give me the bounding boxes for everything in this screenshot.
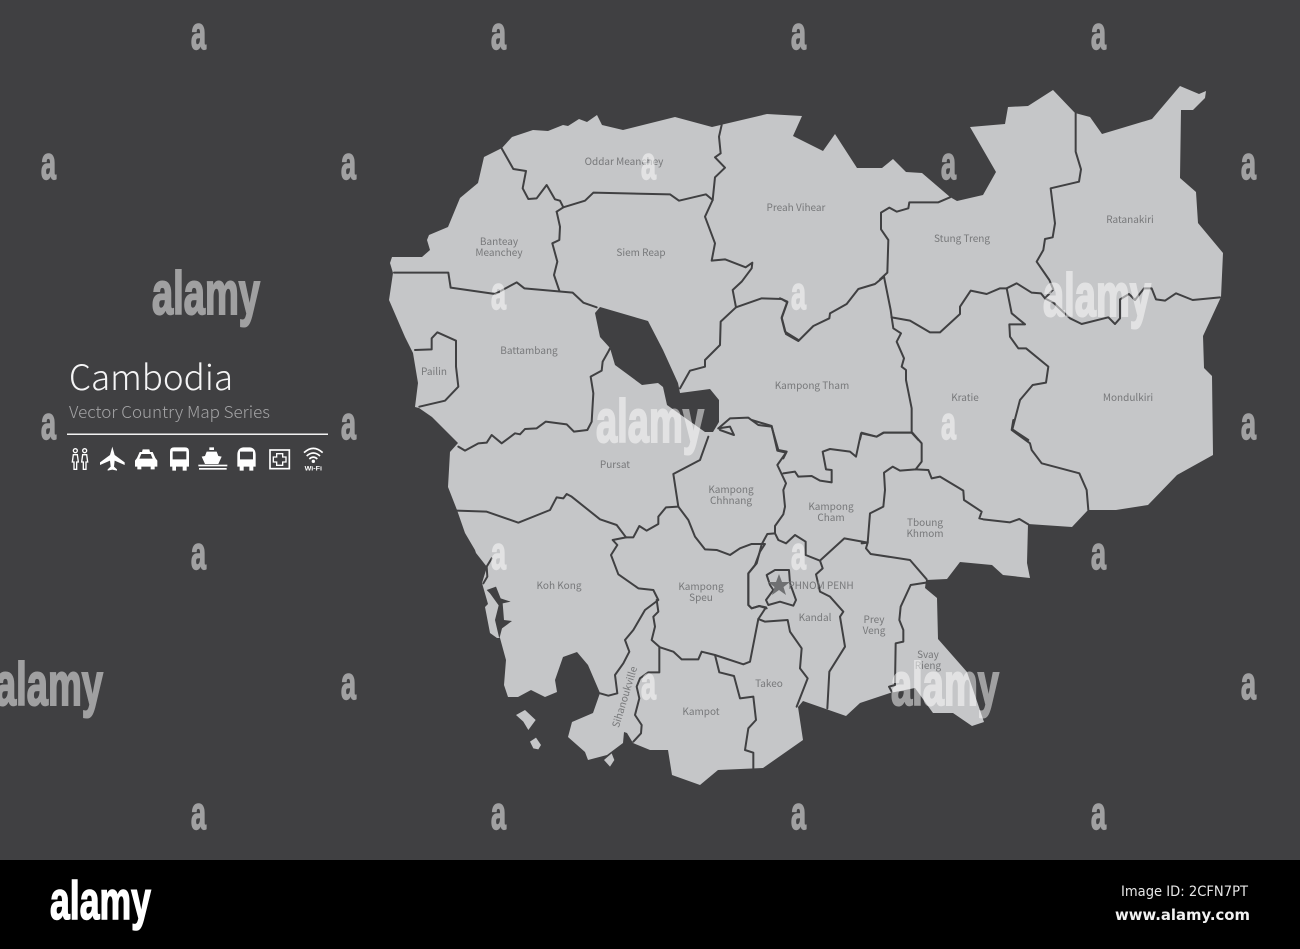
- icon: restroom: [72, 449, 88, 469]
- website: www.alamy.com: [1115, 906, 1250, 924]
- label: Prey Veng: Veng: [863, 622, 886, 637]
- icon: wifi: [304, 448, 323, 473]
- small watermark letters: a: [191, 787, 206, 839]
- small watermark letters: a: [1241, 397, 1256, 449]
- small watermark letters: a: [791, 527, 806, 579]
- small watermark letters: a: [341, 657, 356, 709]
- divider line: [67, 434, 328, 435]
- label: Kampong Cham: Cham: [817, 509, 845, 524]
- small watermark letters: a: [791, 267, 806, 319]
- icon: bus front: [237, 447, 256, 471]
- label: Banteay Meanchey: Meanchey: [475, 244, 523, 259]
- small watermark letters: a: [341, 397, 356, 449]
- small watermark letters: a: [641, 657, 656, 709]
- label: Kandal: Kandal: [799, 609, 832, 624]
- large watermark words: alamy: [1043, 262, 1151, 329]
- capital star: [768, 574, 790, 595]
- small watermark letters: a: [491, 527, 506, 579]
- image id: Image ID: 2CFN7PT: [1121, 884, 1248, 900]
- icon: bus: [170, 447, 189, 471]
- small watermark letters: a: [1091, 7, 1106, 59]
- label: Siem Reap: Siem Reap: [616, 244, 666, 259]
- label: Banteay Meanchey: Banteay: [480, 233, 519, 248]
- footer logo: alamy: [50, 871, 151, 931]
- small watermark letters: a: [491, 787, 506, 839]
- label: Pursat: Pursat: [600, 456, 630, 471]
- label: Kampong Cham: Kampong: [808, 498, 854, 513]
- province boundaries: north-west: [394, 125, 798, 458]
- small watermark letters: a: [491, 267, 506, 319]
- subtitle: Vector Country Map Series: [69, 399, 270, 423]
- small watermark letters: a: [791, 787, 806, 839]
- country silhouette: [389, 86, 1223, 785]
- small watermark letters: a: [491, 7, 506, 59]
- map of Cambodia: [389, 86, 1223, 785]
- label: Kratie: Kratie: [951, 389, 979, 404]
- label: Koh Kong: Koh Kong: [537, 577, 582, 592]
- label: Kampong Speu: Kampong: [678, 578, 724, 593]
- small watermark letters: a: [191, 7, 206, 59]
- icon: ferry boat: [198, 447, 227, 470]
- small watermark letters: a: [791, 7, 806, 59]
- footer bar: [0, 860, 1300, 949]
- icon: hospital cross: [270, 450, 289, 469]
- label: Pailin: Pailin: [421, 363, 447, 378]
- small watermark letters: a: [941, 397, 956, 449]
- label: Kampot: Kampot: [682, 703, 720, 718]
- small watermark letters: a: [341, 137, 356, 189]
- label: Prey Veng: Prey: [864, 611, 885, 626]
- label: Ratanakiri: Ratanakiri: [1106, 211, 1154, 226]
- icon: wifi: Wi-Fi: [305, 466, 322, 473]
- label: Kampong Chhnang: Chhnang: [710, 492, 752, 507]
- title block: [67, 350, 328, 435]
- large watermark words: alamy: [0, 651, 103, 718]
- label: Battambang: Battambang: [500, 342, 558, 357]
- coastal inlets, Koh Kong: [483, 558, 512, 639]
- large watermark words: alamy: [891, 651, 999, 718]
- province boundaries: south-east: [748, 420, 1088, 708]
- label: Preah Vihear: Preah Vihear: [767, 199, 826, 214]
- label: Sihanoukville: Sihanoukville: [607, 664, 640, 729]
- small watermark letters: a: [1241, 137, 1256, 189]
- icon: taxi: [135, 449, 157, 469]
- label: Kampong Tham: Kampong Tham: [775, 377, 849, 392]
- label: Takeo: Takeo: [755, 675, 783, 690]
- label: Phnom Penh: PHNOM PENH: [788, 577, 854, 592]
- title: Cambodia: [69, 350, 233, 401]
- small watermark letters: a: [1091, 787, 1106, 839]
- large watermark words: [0, 260, 1151, 718]
- small watermark letters: a: [1241, 657, 1256, 709]
- label: Svay Rieng: Rieng: [915, 657, 942, 672]
- large watermark words: alamy: [152, 260, 260, 327]
- label: Svay Rieng: Svay: [917, 646, 940, 661]
- large watermark words: alamy: [596, 388, 704, 455]
- icon: airplane: [100, 447, 125, 471]
- label: Mondulkiri: Mondulkiri: [1103, 389, 1153, 404]
- small watermark letters: a: [1091, 527, 1106, 579]
- small watermark letters: a: [191, 527, 206, 579]
- province labels: [421, 153, 1154, 729]
- label: Oddar Meanchey: Oddar Meanchey: [585, 153, 664, 168]
- label: Kampong Chhnang: Kampong: [708, 481, 754, 496]
- small watermark letters: a: [941, 137, 956, 189]
- province boundaries: south-west: [457, 437, 808, 768]
- label: Tboung Khmom: Tboung: [907, 514, 943, 529]
- transport icons row: [72, 447, 323, 473]
- Tonle Sap lake: [595, 307, 719, 432]
- small watermark letters: a: [41, 397, 56, 449]
- small watermark letters: a: [41, 137, 56, 189]
- small watermark letters: a: [641, 137, 656, 189]
- islands: [516, 710, 614, 767]
- label: Kampong Speu: Speu: [689, 589, 713, 604]
- province boundaries: north-east: [780, 113, 1220, 440]
- label: Tboung Khmom: Khmom: [906, 525, 944, 540]
- label: Stung Treng: Stung Treng: [934, 230, 990, 245]
